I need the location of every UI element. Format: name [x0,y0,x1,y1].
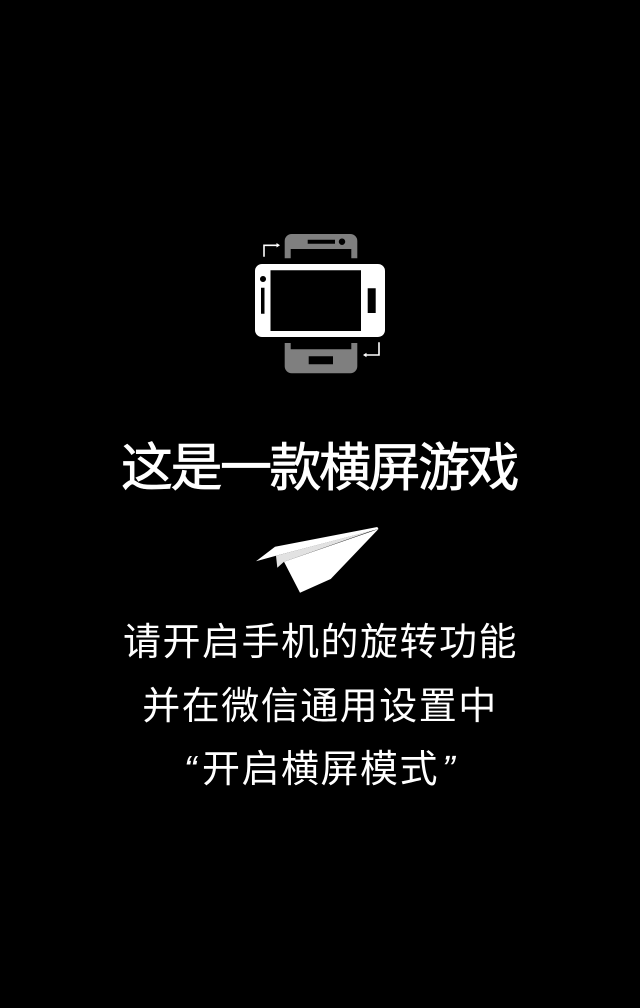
text: instructions: ” [442,749,456,791]
text: instructions [123,622,518,791]
icon: white phone [255,264,385,337]
text: instructions: “ [184,749,198,791]
text: instructions: 开启横屏模式 [202,749,439,791]
title: 这是一款横屏游戏 [121,440,517,498]
text: instructions: 并在微信通用设置中 [142,686,498,728]
icon: rotate arrow bottom right [363,342,379,357]
icon: grey phone top [285,234,357,258]
icon: paper plane [256,527,378,593]
icon: rotate arrow top left [264,243,280,257]
icon: grey phone bottom [285,343,357,373]
text: instructions: 请开启手机的旋转功能 [123,622,518,664]
